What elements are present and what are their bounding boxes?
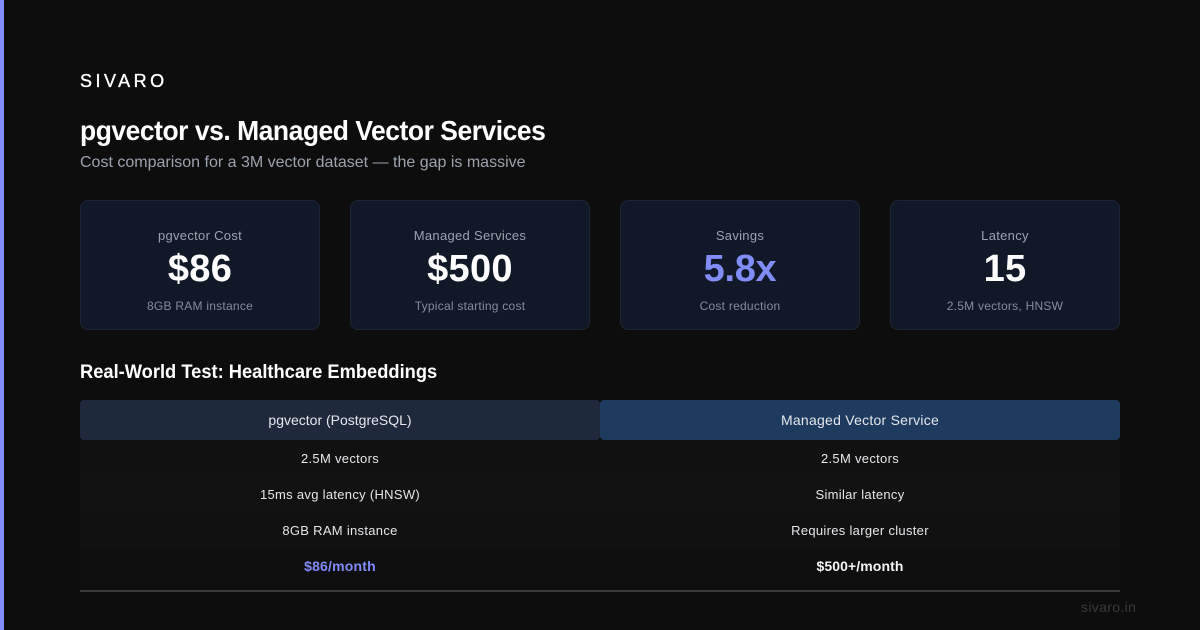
- row: monthly price: $500+/month: [816, 558, 904, 574]
- accent bar: [0, 0, 4, 630]
- row: vectors: 2.5M vectors: [301, 451, 379, 466]
- row: instance: Requires larger cluster: [791, 523, 929, 538]
- panel: pgvector cost: 8GB RAM instance: [147, 299, 253, 313]
- row: instance: [80, 512, 1120, 548]
- panel: latency: 15: [984, 248, 1026, 290]
- row: instance: 8GB RAM instance: [282, 523, 398, 538]
- panel: latency: Latency: [981, 228, 1029, 243]
- footer url: sivaro.in: [1081, 599, 1136, 615]
- panel: savings: 5.8x: [704, 248, 776, 290]
- panel: pgvector cost: pgvector Cost: [158, 228, 242, 243]
- row: vectors: 2.5M vectors: [821, 451, 899, 466]
- row: latency: 15ms avg latency (HNSW): [260, 487, 420, 502]
- panel: latency: 2.5M vectors, HNSW: [947, 299, 1063, 313]
- panel: managed services: $500: [427, 248, 513, 290]
- row: monthly price: [80, 548, 1120, 584]
- comparison table: [80, 400, 1120, 592]
- table header: pgvector: pgvector (PostgreSQL): [268, 412, 412, 428]
- panel: managed services: Typical starting cost: [415, 299, 525, 313]
- panel: savings: [620, 200, 860, 330]
- panel: managed services: Managed Services: [414, 228, 526, 243]
- brand logo: SIVARO: [80, 71, 168, 91]
- panel: savings: Savings: [716, 228, 764, 243]
- panel: savings: Cost reduction: [700, 299, 780, 313]
- row: monthly price: $86/month: [304, 558, 376, 574]
- row: vectors: [80, 440, 1120, 476]
- row: latency: [80, 476, 1120, 512]
- table header: managed: Managed Vector Service: [781, 412, 939, 428]
- table header: pgvector: [80, 400, 600, 440]
- panel: latency: [890, 200, 1120, 330]
- panel: pgvector cost: [80, 200, 320, 330]
- row: latency: Similar latency: [815, 487, 905, 502]
- subtitle: Cost comparison for a 3M vector dataset — the gap is massive: [80, 154, 526, 171]
- panel: managed services: [350, 200, 590, 330]
- table header: managed: [600, 400, 1120, 440]
- panel: pgvector cost: $86: [168, 248, 232, 290]
- title: pgvector vs. Managed Vector Services: [80, 115, 545, 146]
- section heading: Real-World Test: Healthcare Embeddings: [80, 362, 437, 383]
